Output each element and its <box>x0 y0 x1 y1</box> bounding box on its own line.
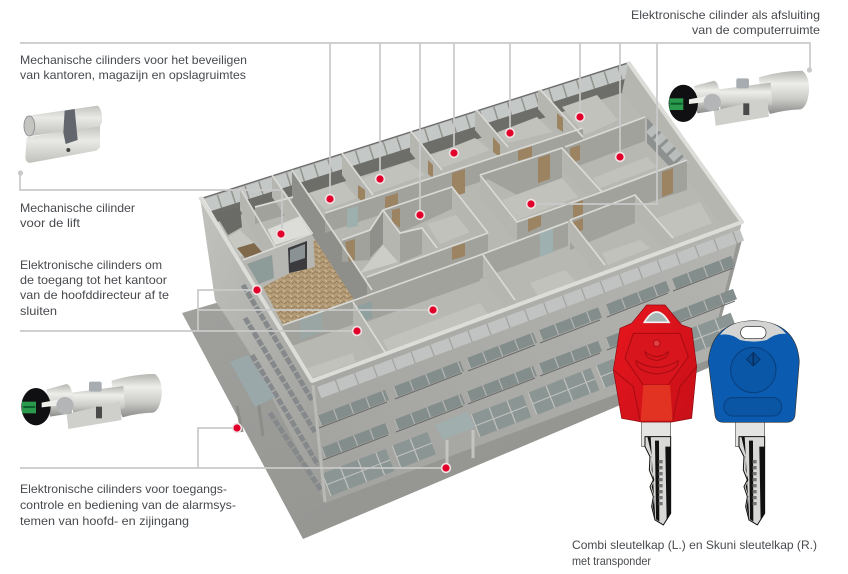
floor base <box>203 62 742 381</box>
carpet atrium <box>263 240 357 325</box>
electronic cylinder photo, left <box>21 374 162 429</box>
main entrance canopy <box>435 412 475 468</box>
lift box front <box>247 241 315 287</box>
building exterior <box>200 197 742 503</box>
text: computer room: van de computerruimte <box>692 23 820 37</box>
red Combi key <box>613 305 697 525</box>
key blade <box>642 422 671 525</box>
electronic cylinder photo, right <box>669 71 809 126</box>
corridor wall with doors <box>325 128 583 233</box>
ground plate <box>182 240 742 539</box>
front wall of big room <box>517 192 602 240</box>
wall top rims <box>240 87 687 352</box>
leader end markers <box>18 67 812 176</box>
inner zigzag room <box>342 188 470 272</box>
text: director office: sluiten <box>20 304 57 318</box>
text: director office: van de hoofddirecteur af te <box>20 288 169 302</box>
mechanical cylinder photo <box>24 106 102 163</box>
right outer wall <box>622 65 628 93</box>
text: lift: Mechanische cilinder <box>20 201 135 215</box>
text: mechanical cylinders: van kantoren, magazijn en opslagruimtes <box>20 68 246 82</box>
text: access control: temen van hoofd- en zijingang <box>20 514 189 528</box>
right lower rooms <box>480 196 712 295</box>
text: mechanical cylinders: Mechanische cilinders voor het beveiligen <box>20 53 247 67</box>
text: lift: voor de lift <box>20 216 81 230</box>
front facade <box>312 222 742 503</box>
text: access control: Elektronische cilinders voor toegangs- <box>20 482 227 496</box>
room floors, back row <box>310 95 618 210</box>
wall with door to right room <box>602 161 687 207</box>
roof cutaway floor plan <box>203 62 742 381</box>
text: keys caption: met transponder <box>572 554 651 568</box>
back wall windows <box>203 63 628 226</box>
big central room <box>480 150 578 220</box>
text: access control: controle en bediening van de alarmsys- <box>20 498 236 512</box>
corridor wall with door, centre <box>367 233 488 299</box>
key blade <box>736 422 765 525</box>
side entrance canopy <box>230 355 275 436</box>
roof outer rim <box>200 62 742 381</box>
left room and lift shaft <box>220 177 310 258</box>
left facade <box>200 197 325 503</box>
lower left rooms <box>283 255 490 378</box>
leader lines <box>20 43 810 468</box>
text: keys caption: Combi sleutelkap (L.) en Skuni sleutelkap (R.) <box>572 538 817 552</box>
red location dots <box>233 113 624 472</box>
back-row partition walls <box>342 90 563 200</box>
text: director office: de toegang tot het kantoor <box>20 273 167 287</box>
blue Skuni key <box>708 321 799 525</box>
upper right room <box>565 117 687 188</box>
text: computer room: Elektronische cilinder als afsluiting <box>631 8 820 22</box>
text: director office: Elektronische cilinders om <box>20 258 162 272</box>
long central wall <box>292 172 367 300</box>
